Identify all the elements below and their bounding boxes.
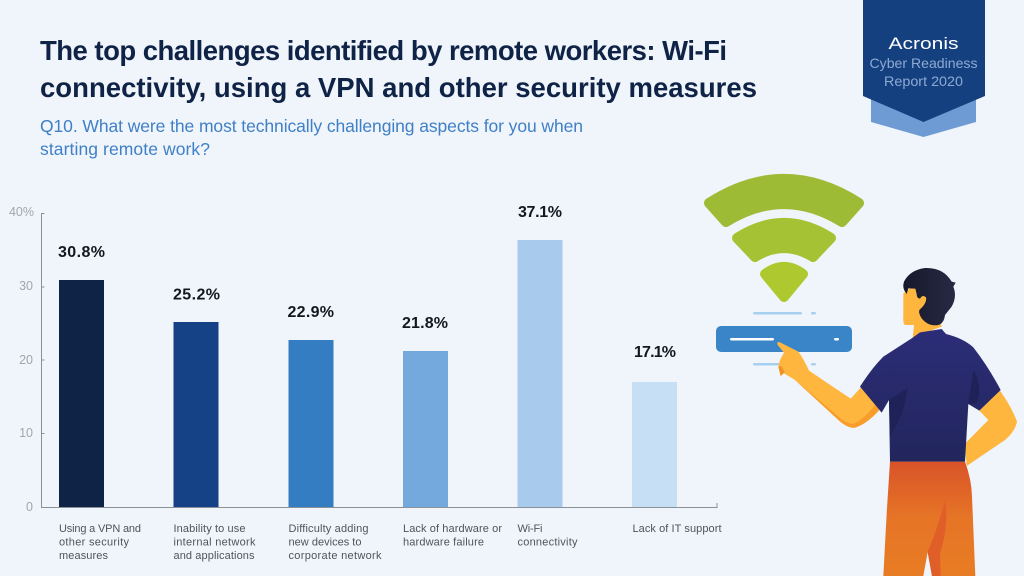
chart axes	[42, 214, 717, 508]
title: The top challenges identified by remote workers: Wi-Fi	[40, 35, 727, 66]
subtitle question: Q10. What were the most technically challenging aspects for you when	[40, 116, 583, 136]
category labels: Difficulty adding	[288, 523, 368, 535]
value labels: 21.8%	[402, 315, 448, 332]
bar: Lack of hardware 21.8%	[403, 351, 448, 507]
category labels: new devices to	[288, 536, 362, 548]
category labels: Lack of IT support	[632, 523, 722, 535]
value labels: 17.1%	[634, 344, 676, 361]
right arm	[965, 388, 1017, 466]
subtitle question	[40, 116, 583, 159]
category labels: other security	[59, 536, 130, 548]
subtitle question: starting remote work?	[40, 139, 210, 159]
hair	[903, 268, 956, 325]
bar: Difficulty adding new devices 22.9%	[288, 340, 334, 507]
y axis labels: 30	[19, 279, 33, 293]
category labels: Inability to use	[174, 523, 246, 535]
icon: router status bar	[716, 312, 852, 366]
bar chart	[9, 204, 722, 562]
category labels: corporate network	[288, 550, 382, 562]
category labels: internal network	[174, 536, 256, 548]
title	[40, 35, 757, 103]
bar: Wi-Fi connectivity 37.1%	[518, 240, 562, 507]
value labels	[58, 204, 676, 361]
category labels: Lack of hardware or	[403, 523, 502, 535]
y axis labels	[9, 205, 34, 514]
category labels: hardware failure	[403, 536, 484, 548]
value labels: 30.8%	[58, 244, 105, 261]
y axis labels: 0	[26, 500, 33, 514]
badge: Acronis Cyber Readiness Report 2020: Acronis	[888, 34, 958, 53]
neck and face	[903, 283, 942, 338]
category labels: measures	[59, 550, 108, 562]
title: connectivity, using a VPN and other security measures	[40, 72, 757, 103]
category labels: Using a VPN and	[59, 523, 141, 535]
value labels: 25.2%	[173, 286, 220, 304]
category labels: Wi-Fi	[518, 523, 542, 535]
left arm and hand	[777, 342, 879, 428]
badge: Acronis Cyber Readiness Report 2020	[863, 0, 985, 137]
category labels: and applications	[174, 550, 255, 562]
y axis labels: 10	[19, 426, 33, 440]
y axis labels: 40%	[9, 205, 34, 219]
y axis labels: 20	[19, 353, 33, 367]
badge: Acronis Cyber Readiness Report 2020: Report 2020	[884, 73, 963, 89]
illustration: man pointing at the bar	[777, 268, 1017, 576]
bar: Lack of IT support 17.1%	[632, 382, 677, 507]
shirt	[860, 329, 1001, 462]
bar: Using a VPN 30.8%	[59, 280, 104, 507]
icon: Wi-Fi signal	[709, 179, 859, 297]
category labels: connectivity	[518, 536, 578, 548]
value labels: 37.1%	[518, 204, 562, 221]
value labels: 22.9%	[288, 304, 334, 321]
badge: Acronis Cyber Readiness Report 2020: Cyber Readiness	[870, 55, 978, 71]
category labels	[59, 523, 722, 562]
bar: Inability to use internal network 25.2%	[174, 322, 218, 507]
pants	[883, 462, 975, 576]
